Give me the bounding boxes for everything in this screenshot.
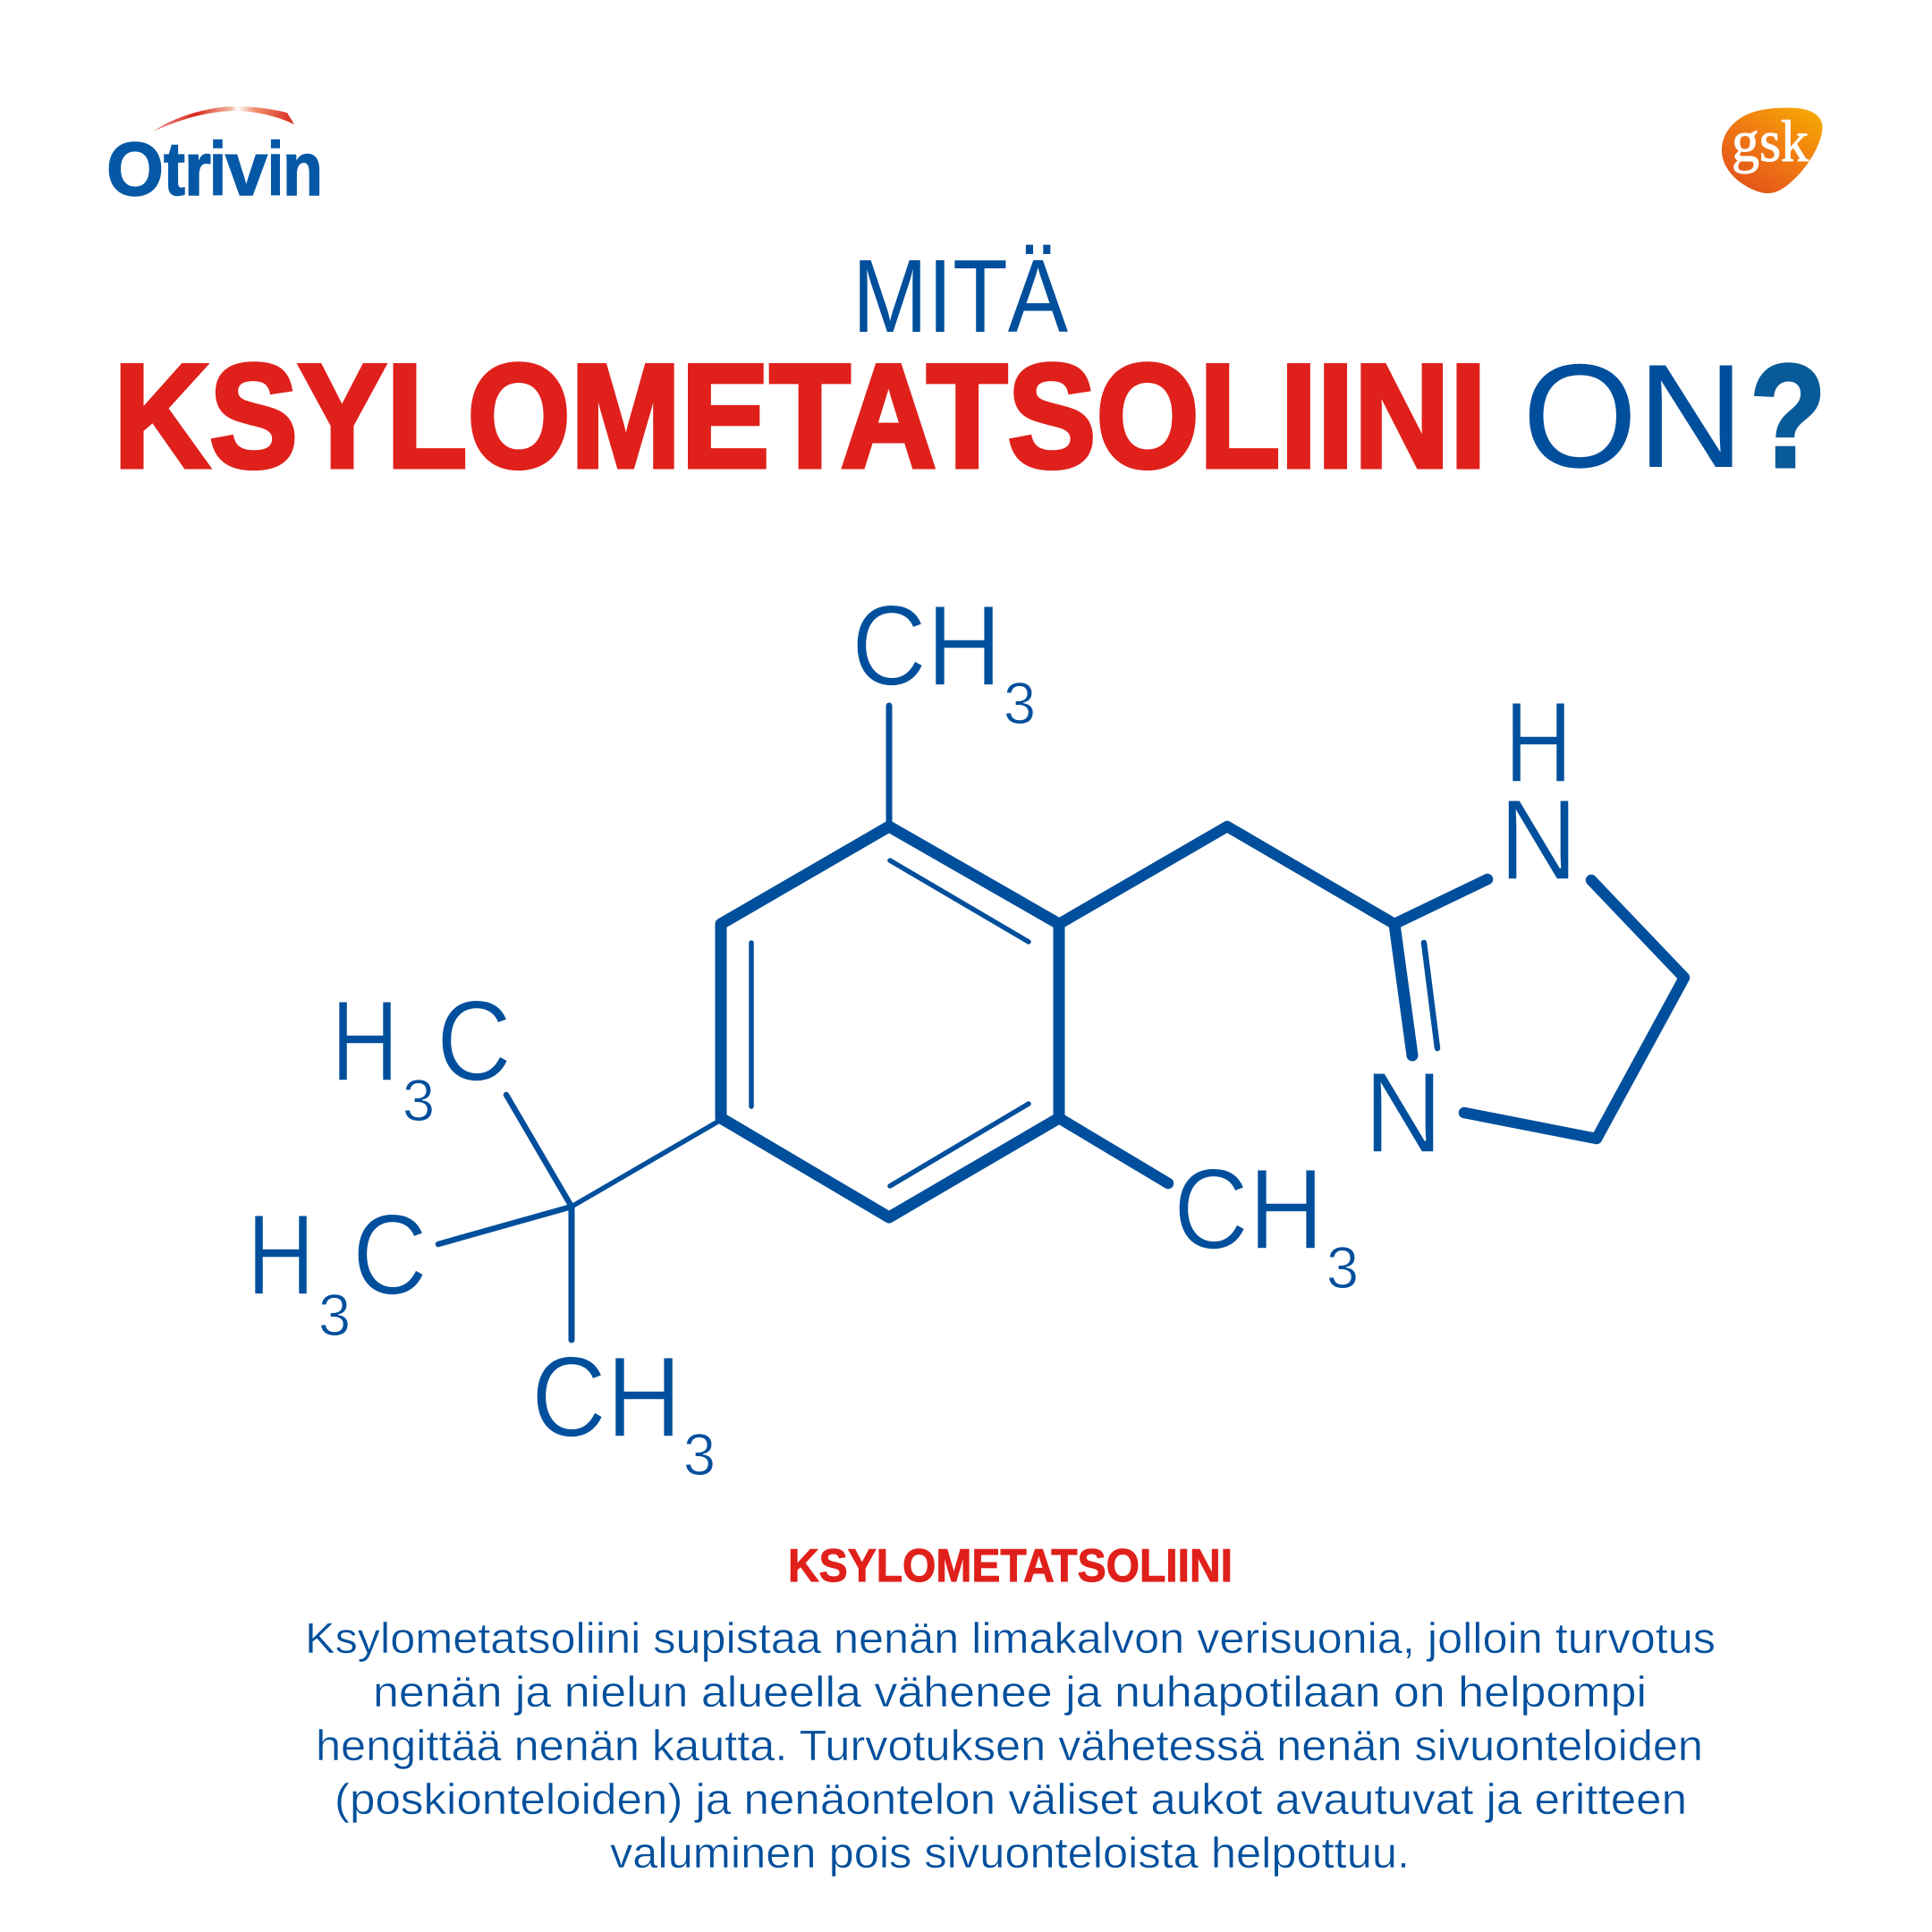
title line 2: question mark: ? <box>1750 334 1826 498</box>
label: top CH3: CH <box>852 582 1002 710</box>
label: middle H3C: 3 <box>318 1282 351 1348</box>
body paragraph: (poskionteloiden) ja nenäontelon väliset aukot avautuvat ja eritteen <box>335 1776 1687 1824</box>
logo wordmark <box>106 127 323 211</box>
logo wordmark: r <box>184 127 211 211</box>
logo: Otrivin <box>106 106 323 211</box>
label: top CH3: 3 <box>1004 670 1036 736</box>
title line 2: drug name: KSYLOMETATSOLIINI <box>114 334 1487 498</box>
label: middle H3C: H <box>247 1191 315 1319</box>
logo wordmark: O <box>106 127 164 211</box>
logo wordmark: v <box>225 127 267 211</box>
bonds: side chain and imidazoline ring <box>1059 826 1684 1183</box>
label: middle H3C <box>247 1191 428 1348</box>
logo wordmark: t <box>164 127 185 211</box>
title line 2: ON: ON <box>1522 334 1744 498</box>
gsk orange blob <box>1722 108 1823 193</box>
label: upper H3C <box>331 978 512 1133</box>
logo wordmark: i <box>267 127 284 211</box>
bonds: tert-butyl and methyl <box>438 706 889 1340</box>
body heading: KSYLOMETATSOLIINI <box>788 1540 1233 1592</box>
label: right CH3: CH <box>1174 1146 1324 1274</box>
chemical structure: xylometazoline <box>247 582 1684 1487</box>
label: middle H3C: C <box>352 1191 428 1319</box>
label: upper H3C: C <box>436 978 512 1106</box>
logo: gsk <box>1722 108 1823 193</box>
body paragraph: nenän ja nielun alueella vähenee ja nuhapotilaan on helpompi <box>373 1669 1647 1716</box>
label: H over N <box>1499 679 1578 904</box>
label: H over N: H <box>1504 679 1572 807</box>
label: upper H3C: 3 <box>402 1067 435 1133</box>
logo swoosh <box>153 106 294 131</box>
body paragraph <box>305 1615 1716 1877</box>
gsk wordmark: gsk <box>1732 109 1809 174</box>
label: bottom CH3: 3 <box>683 1421 716 1487</box>
title line 1: MITÄ <box>852 238 1069 354</box>
logo wordmark: n <box>283 127 323 211</box>
benzene ring <box>721 826 1059 1217</box>
label: lower N: N <box>1364 1049 1443 1177</box>
body paragraph: Ksylometatsoliini supistaa nenän limakalvon verisuonia, jolloin turvotus <box>305 1615 1716 1663</box>
title <box>114 238 1826 498</box>
label: bottom CH3: CH <box>531 1334 682 1462</box>
body paragraph: valuminen pois sivuonteloista helpottuu. <box>610 1830 1410 1877</box>
logo wordmark: i <box>209 127 226 211</box>
body paragraph: hengittää nenän kautta. Turvotuksen vähetessä nenän sivuonteloiden <box>316 1723 1703 1770</box>
label: H over N: N <box>1499 776 1578 904</box>
label: upper H3C: H <box>331 978 399 1106</box>
label: right CH3: 3 <box>1326 1234 1359 1301</box>
